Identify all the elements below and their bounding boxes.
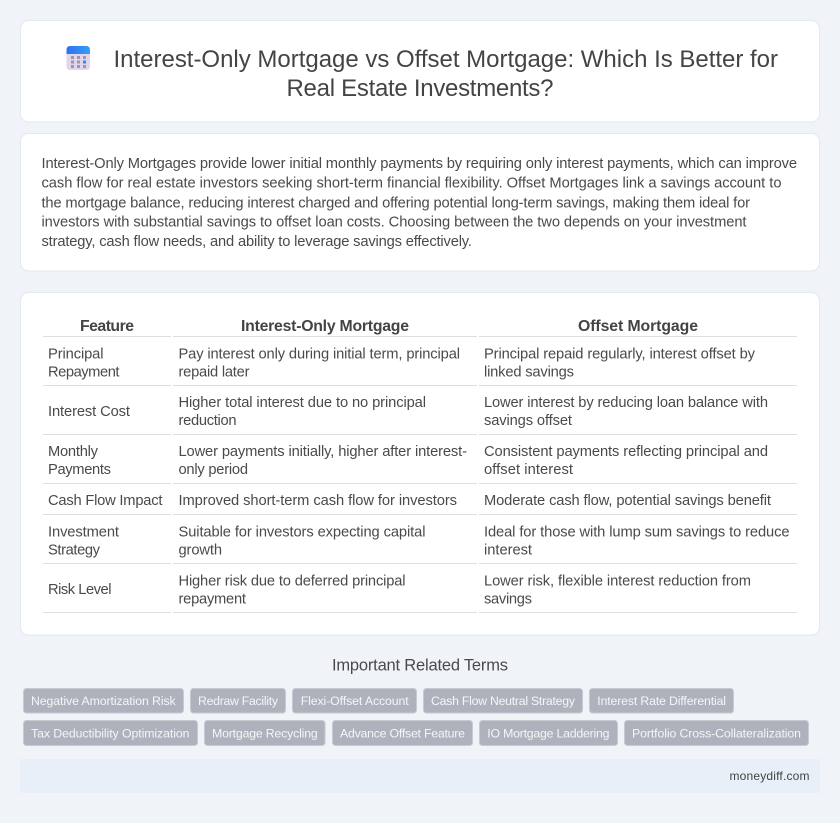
row: monthly payments: only period (178, 462, 248, 478)
row: risk level: Higher risk due to deferred principal (178, 573, 406, 589)
tag: flexi-offset account (292, 688, 416, 713)
row: investment strategy: Investment (48, 524, 119, 540)
row: monthly payments: Lower payments initially, higher after interest- (178, 444, 467, 460)
table header: Interest-Only Mortgage (241, 318, 409, 335)
row: cash flow impact (48, 493, 771, 509)
row: principal repayment: Pay interest only during initial term, principal (178, 346, 460, 362)
row: principal repayment (48, 346, 756, 380)
row: risk level: Risk Level (48, 582, 112, 598)
row: interest cost: Lower interest by reducing loan balance with (484, 395, 768, 411)
tag: io mortgage laddering: IO Mortgage Laddering (487, 726, 610, 740)
tag: flexi-offset account: Flexi-Offset Account (301, 694, 409, 708)
tag: interest rate differential: Interest Rate Differential (597, 694, 726, 708)
row: interest cost: savings offset (484, 413, 572, 429)
tag: interest rate differential (590, 688, 734, 713)
tag: advance offset feature: Advance Offset Feature (340, 726, 465, 740)
tag: portfolio cross-collateralization (624, 720, 808, 746)
row: monthly payments: Monthly (48, 444, 99, 460)
tag: cash flow neutral strategy (424, 688, 582, 713)
description text: cash flow for real estate investors seeking short-term financial flexibility. Offset Mortgages link a savings account to (42, 176, 782, 192)
row: cash flow impact: Improved short-term cash flow for investors (178, 493, 457, 509)
panel: description (20, 134, 820, 271)
table header (80, 318, 698, 335)
table header: Feature (80, 318, 134, 335)
row: investment strategy: Strategy (48, 542, 101, 558)
tag: negative amortization risk (24, 688, 184, 713)
tag: advance offset feature (332, 720, 472, 746)
tag: tax deductibility optimization (24, 720, 198, 746)
description text: the mortgage balance, reducing interest charged and offering potential long-term savings, making them ideal for (42, 196, 750, 212)
panel: comparison table (20, 292, 820, 635)
row: monthly payments (48, 444, 768, 478)
description text: Interest-Only Mortgages provide lower initial monthly payments by requiring only interest payments, which can improve (42, 156, 797, 172)
title (114, 46, 778, 102)
footer source: moneydiff.com (730, 769, 810, 783)
description text: strategy, cash flow needs, and ability to leverage savings effectively. (42, 234, 472, 250)
row: interest cost (48, 395, 768, 429)
tag: redraw facility (190, 688, 286, 713)
row: risk level: repayment (178, 591, 246, 607)
heading: important related terms: Important Related Terms (332, 657, 508, 675)
tag: mortgage recycling (204, 720, 325, 746)
row: principal repayment: repaid later (178, 364, 250, 380)
description text: investors with substantial savings to offset loan costs. Choosing between the two depends on your investment (42, 215, 746, 231)
icon: calendar (66, 46, 90, 70)
header panel (20, 20, 820, 122)
row: principal repayment: Repayment (48, 364, 120, 380)
tag: tax deductibility optimization: Tax Deductibility Optimization (31, 726, 190, 740)
row: interest cost: reduction (178, 413, 236, 429)
row: investment strategy: Ideal for those with lump sum savings to reduce (484, 524, 790, 540)
tag: cash flow neutral strategy: Cash Flow Neutral Strategy (431, 694, 576, 708)
tag: io mortgage laddering (480, 720, 618, 746)
row: monthly payments: Consistent payments reflecting principal and (484, 444, 768, 460)
description text (42, 156, 797, 250)
row: monthly payments: Payments (48, 462, 111, 478)
row: cash flow impact: Moderate cash flow, potential savings benefit (484, 493, 771, 509)
row: monthly payments: offset interest (484, 462, 573, 478)
tag: negative amortization risk: Negative Amortization Risk (31, 694, 177, 708)
related term tags (24, 688, 808, 746)
table header: Offset Mortgage (578, 318, 698, 335)
tag: redraw facility: Redraw Facility (198, 694, 279, 708)
row: investment strategy: Suitable for investors expecting capital (178, 524, 426, 540)
row: principal repayment: linked savings (484, 364, 574, 380)
row: investment strategy (48, 524, 790, 558)
row: investment strategy: interest (484, 542, 532, 558)
row: risk level (48, 573, 751, 607)
row: principal repayment: Principal repaid regularly, interest offset by (484, 346, 756, 362)
tag: mortgage recycling: Mortgage Recycling (212, 726, 318, 740)
row: risk level: savings (484, 591, 532, 607)
row: interest cost: Interest Cost (48, 404, 130, 420)
row: principal repayment: Principal (48, 346, 104, 362)
title: Real Estate Investments? (286, 75, 554, 102)
row: cash flow impact: Cash Flow Impact (48, 493, 162, 509)
footer (20, 759, 820, 793)
row: risk level: Lower risk, flexible interest reduction from (484, 573, 751, 589)
row: interest cost: Higher total interest due to no principal (178, 395, 426, 411)
row: investment strategy: growth (178, 542, 222, 558)
title: Interest-Only Mortgage vs Offset Mortgage: Which Is Better for (114, 46, 778, 73)
tag: portfolio cross-collateralization: Portfolio Cross-Collateralization (632, 726, 801, 740)
